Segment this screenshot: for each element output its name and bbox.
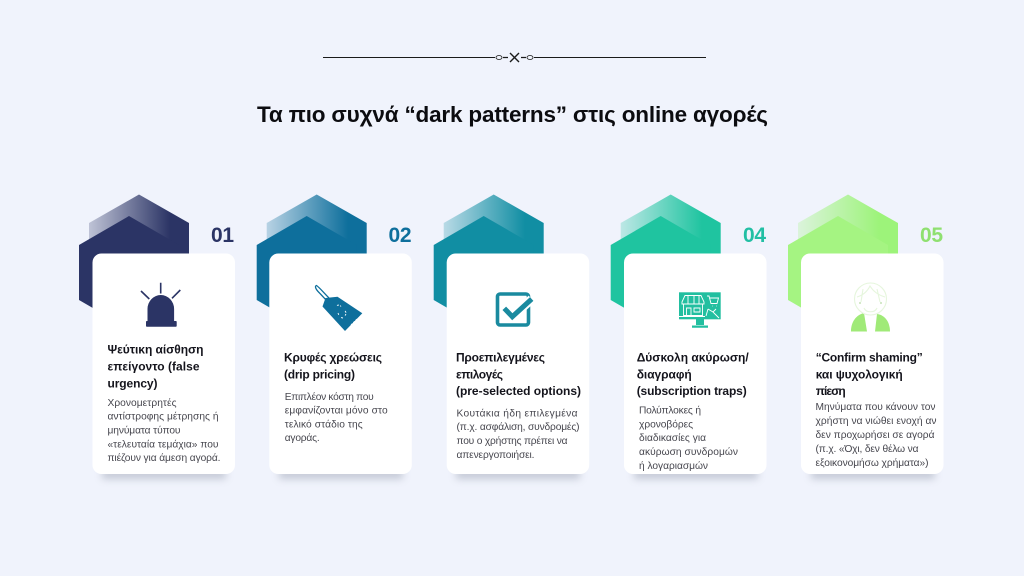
number 01: 01 <box>211 224 234 247</box>
heading 2: Κρυφές χρεώσεις <box>284 350 382 364</box>
body text 2: Επιπλέον κόστη που <box>285 391 374 403</box>
heading 4: (subscription traps) <box>637 384 747 398</box>
body text 1: πιέζουν για άμεση αγορά. <box>108 452 220 464</box>
heading 4: Δύσκολη ακύρωση/ <box>637 350 749 364</box>
body text 1: «τελευταία τεμάχια» που <box>108 438 219 450</box>
body text 5: εξοικονομήσω χρήματα») <box>816 457 928 469</box>
body text 4: Πολύπλοκες ή <box>639 404 701 416</box>
body text 1: Χρονομετρητές <box>108 397 177 409</box>
icon: siren <box>141 283 180 327</box>
body text 3: απενεργοποιήσει. <box>456 449 534 461</box>
heading 4 <box>637 350 749 398</box>
card 1 <box>92 254 235 474</box>
body text 5: Μηνύματα που κάνουν τον <box>816 401 936 413</box>
heading 3: (pre-selected options) <box>456 384 581 398</box>
body text 1: μηνύματα τύπου <box>108 424 181 436</box>
body text 3: που ο χρήστης πρέπει να <box>456 435 568 447</box>
body text 4 <box>639 404 738 472</box>
hexagon front 3 <box>434 216 534 329</box>
number 04: 04 <box>743 224 766 247</box>
heading 3: Προεπιλεγμένες <box>456 350 545 364</box>
card 5 <box>801 254 944 474</box>
heading 5: “Confirm shaming” <box>816 350 923 364</box>
body text 4: ακύρωση συνδρομών <box>639 446 738 458</box>
panel: card 2 drip pricing <box>257 194 412 479</box>
body text 4: χρονοβόρες <box>639 418 693 430</box>
body text 3 <box>456 408 580 461</box>
icon: person <box>851 283 890 332</box>
card shadow 4 <box>634 469 758 479</box>
icon: price tag <box>315 286 362 331</box>
icon: checkbox <box>498 294 532 325</box>
hexagon front 5 <box>788 216 888 329</box>
body text 3: Κουτάκια ήδη επιλεγμένα <box>456 408 578 420</box>
hexagon back 3 <box>444 194 544 256</box>
card shadow 5 <box>811 469 935 479</box>
heading 5 <box>816 350 923 398</box>
panel: card 3 pre-selected options <box>434 194 589 479</box>
body text 2 <box>285 391 388 444</box>
hexagon back 1 <box>89 194 189 256</box>
icon: online store monitor <box>679 292 721 328</box>
heading 1: urgency) <box>108 376 158 390</box>
body text 3: (π.χ. ασφάλιση, συνδρομές) <box>456 421 580 433</box>
number 02: 02 <box>388 224 412 247</box>
card 3 <box>447 254 589 474</box>
body text 2: εμφανίζονται μόνο στο <box>285 404 388 416</box>
card shadow 3 <box>456 469 580 479</box>
heading 1: επείγοντο (false <box>108 360 200 374</box>
heading 1: Ψεύτικη αίσθηση <box>108 342 204 356</box>
body text 1: αντίστροφης μέτρησης ή <box>108 410 218 422</box>
body text 5 <box>816 401 936 469</box>
hexagon back 4 <box>621 194 721 256</box>
heading 3: επιλογές <box>456 368 503 382</box>
heading 2 <box>284 350 382 382</box>
body text 4: διαδικασίες για <box>639 432 706 444</box>
heading 3 <box>456 350 581 398</box>
heading 2: (drip pricing) <box>284 368 355 382</box>
heading 5: πίεση <box>816 384 846 398</box>
hexagon back 2 <box>267 194 367 256</box>
body text 2: τελικό στάδιο της <box>285 418 363 430</box>
hexagon front 2 <box>257 216 357 329</box>
panel: card 5 confirm shaming <box>788 194 944 479</box>
card 2 <box>269 254 412 474</box>
hexagon back 5 <box>798 194 898 256</box>
hexagon front 4 <box>611 216 711 329</box>
card 4 <box>624 254 766 474</box>
title: Τα πιο συχνά “dark patterns” στις online αγορές <box>257 102 768 127</box>
number 05: 05 <box>920 224 943 247</box>
card shadow 2 <box>279 469 403 479</box>
heading 1 <box>108 342 204 390</box>
hexagon front 1 <box>79 216 179 329</box>
heading 5: και ψυχολογική <box>816 368 903 382</box>
body text 5: (π.χ. «Όχι, δεν θέλω να <box>816 443 919 455</box>
body text 4: ή λογαριασμών <box>639 460 708 472</box>
body text 2: αγοράς. <box>285 432 320 444</box>
panel: card 1 false urgency <box>79 194 235 479</box>
body text 5: χρήστη να νιώθει ενοχή αν <box>816 415 936 427</box>
body text 1 <box>108 397 220 464</box>
body text 5: δεν προχωρήσει σε αγορά <box>816 429 935 441</box>
divider ornament <box>323 53 706 62</box>
card shadow 1 <box>102 469 226 479</box>
panel: card 4 subscription traps <box>611 194 766 479</box>
heading 4: διαγραφή <box>637 368 692 382</box>
